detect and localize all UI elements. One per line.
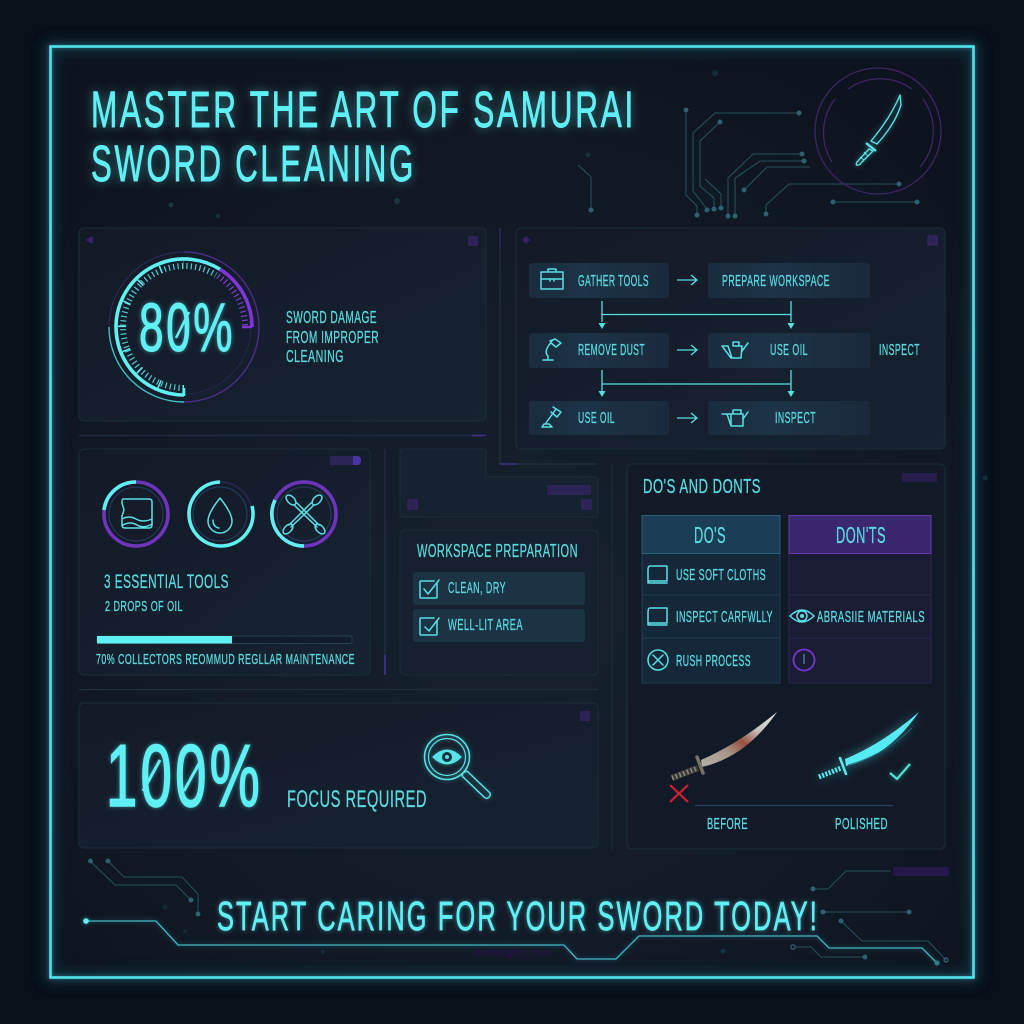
glowing cta trace [83,918,939,966]
row: soft cloths: USE SOFT CLOTHS [676,567,766,584]
dividers [79,228,612,850]
checklist: clean, dry [413,572,585,605]
gauge caption: CLEANING [286,346,344,366]
don'ts column [789,516,931,683]
step: inspect: INSPECT [775,410,816,427]
panel: notched decorative [400,449,598,517]
title [91,81,636,192]
before label: BEFORE [707,816,748,833]
checklist: well-lit area [413,609,585,642]
workspace heading: WORKSPACE PREPARATION [417,540,578,561]
progress caption: 70% COLLECTORS REOMMUD REGLLAR MAINTENANCE [96,651,355,668]
icon: magnifier eye [424,734,490,798]
checklist: well-lit area: WELL-LIT AREA [448,617,523,634]
step: inspect [708,401,870,435]
step: use oil [708,333,870,368]
marker dots [86,237,477,245]
gauge caption: FROM IMPROPER [286,327,379,347]
polished sword [819,712,919,777]
tools text: 2 DROPS OF OIL [105,598,183,615]
row: soft cloths [648,566,766,584]
gauge chart [109,252,259,402]
baseline [695,804,893,806]
row: rush process [648,650,751,670]
corner marker [580,711,590,721]
row: inspect carefully: INSPECT CARFWLLY [676,609,773,626]
row: abrasive materials [790,609,925,626]
bottom circuit traces [88,858,949,962]
icon: cloth [104,482,168,546]
row: abrasive materials: ABRASIIE MATERIALS [817,609,925,626]
icon: oil drop [188,482,253,546]
step: use oil lower [529,401,669,435]
title: SWORD CLEANING [91,135,416,192]
row: rush process: RUSH PROCESS [676,653,751,670]
panel: 80% gauge [79,228,486,421]
icon: sword emblem [815,68,941,194]
do's column [642,516,780,683]
checklist: clean, dry: CLEAN, DRY [448,580,506,597]
flow arrows [598,275,794,423]
before sword [672,712,777,778]
gauge caption: SWORD DAMAGE [286,307,377,327]
panel heading: DO'S AND DONTS [643,476,761,498]
icon: cotton swabs [272,482,336,546]
step: use oil: USE OIL [770,342,808,359]
panel: do's and don'ts [627,464,945,849]
tools text: 3 ESSENTIAL TOOLS [104,571,229,593]
step: gather tools [529,263,669,298]
tools text [104,571,229,615]
panel: process flow [516,228,945,449]
panel: workspace preparation [400,530,598,675]
don'ts column: DON'TS [836,522,886,548]
panel: 100% focus [79,703,598,848]
green check [890,764,910,779]
gauge value [139,289,235,366]
flow markers [522,236,937,245]
stat value: 100% [106,726,263,825]
step: prepare workspace: PREPARE WORKSPACE [722,273,830,290]
step: use oil lower: USE OIL [578,410,615,427]
step: remove dust [529,333,669,368]
step: remove dust: REMOVE DUST [578,342,645,359]
title: MASTER THE ART OF SAMURAI [91,81,636,138]
gauge value: 80% [139,289,235,366]
row: warning clock [794,650,814,670]
panel: essential tools [79,449,370,675]
stat value [106,726,263,825]
watermark: cleaningbro.com [473,948,551,959]
step: prepare workspace [708,263,870,298]
red cross [670,785,688,802]
gauge caption [286,307,379,366]
row: inspect carefully [648,608,773,626]
purple tag [902,473,937,482]
top circuit traces [578,108,920,218]
stat caption: FOCUS REQUIRED [287,786,427,813]
label: inspect: INSPECT [879,342,920,359]
do's column: DO'S [694,522,726,548]
purple tag [330,456,361,465]
progress bar [97,636,352,644]
polished label: POLISHED [835,816,888,833]
step: gather tools: GATHER TOOLS [578,273,649,290]
